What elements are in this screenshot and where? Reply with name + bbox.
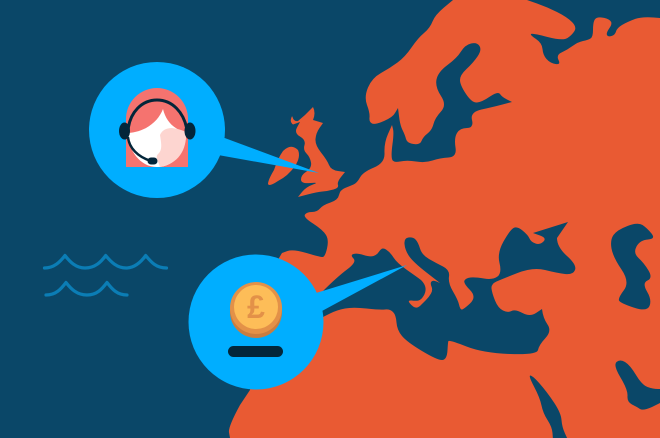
callout: pound coin payment: [188, 254, 407, 390]
callout pointer to Italy: [316, 265, 407, 311]
callout: customer support agent: [89, 62, 319, 198]
Red Sea: [530, 375, 568, 438]
icon: support agent with headset: [119, 88, 196, 167]
landmass: continental Europe and North Africa: [229, 0, 660, 438]
icon: pound coin over slot: [228, 282, 283, 357]
Caspian Sea: [611, 224, 653, 309]
callout pointer to UK: [218, 137, 319, 173]
map of Europe: [229, 0, 660, 438]
icon: pound coin over slot: £: [247, 289, 265, 325]
icon: ocean waves: [44, 256, 166, 295]
Persian Gulf: [615, 360, 660, 410]
seas cut into the landmass: [300, 222, 660, 438]
Mediterranean and Black Sea: [300, 222, 575, 360]
callout circle: [89, 62, 225, 198]
callout circle: [188, 254, 324, 390]
Ireland: [268, 147, 299, 185]
Great Britain: [291, 107, 345, 197]
